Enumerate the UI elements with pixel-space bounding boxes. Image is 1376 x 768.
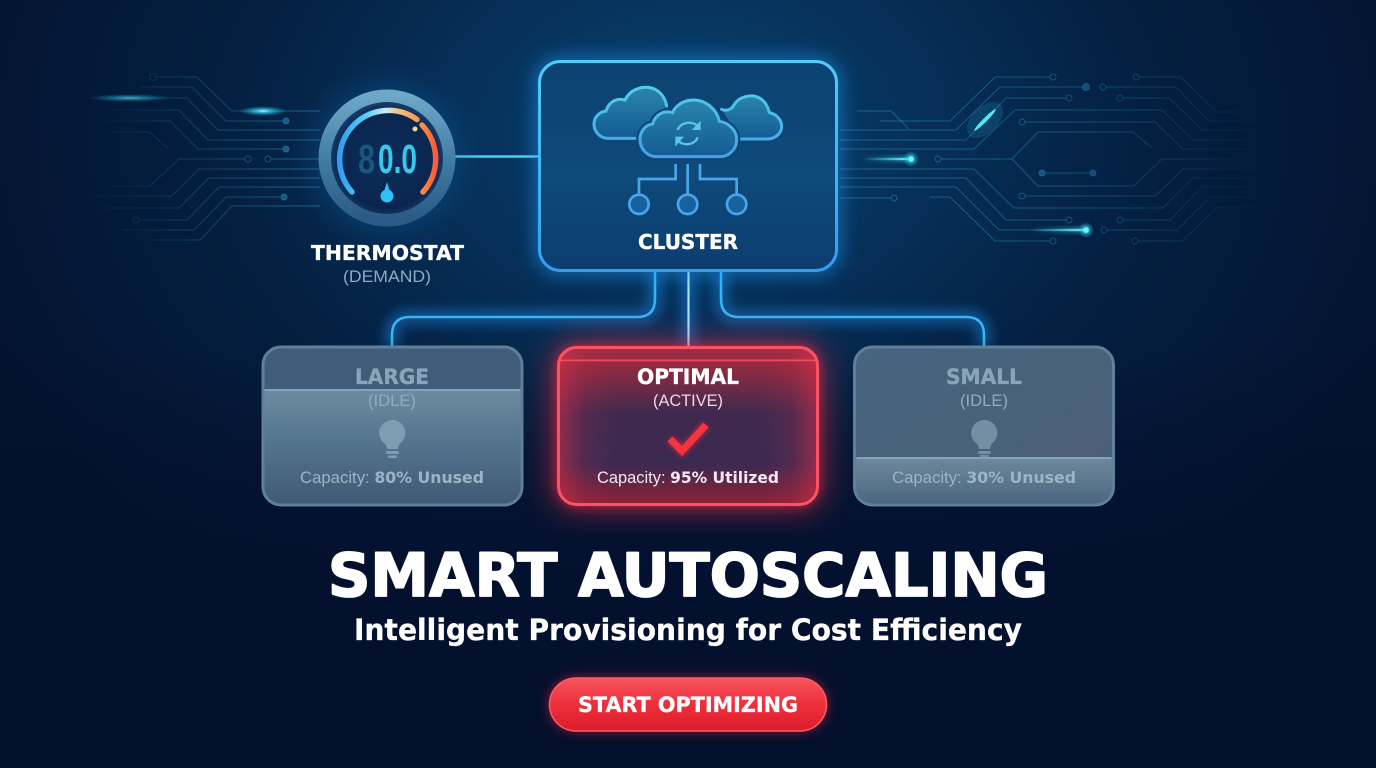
gauge dial bbox=[331, 102, 443, 214]
thermostat label bbox=[311, 241, 464, 286]
icon: red check mark bbox=[670, 425, 706, 451]
panel: large idle bbox=[263, 347, 522, 505]
connector: thermostat to cluster bbox=[454, 153, 540, 160]
large capacity: Capacity: 80% Unused bbox=[300, 468, 484, 487]
subtitle: Intelligent Provisioning for Cost Efficiency bbox=[354, 613, 1022, 647]
digital temperature readout active digits: 0.0 bbox=[378, 136, 417, 182]
icon: clouds with sync bbox=[594, 87, 782, 214]
large title: LARGE bbox=[355, 365, 429, 389]
thermostat label: THERMOSTAT bbox=[311, 241, 464, 265]
icon: dim light bulb bbox=[971, 420, 997, 458]
small capacity: Capacity: 30% Unused bbox=[892, 468, 1076, 487]
cluster label: CLUSTER bbox=[638, 230, 738, 254]
large status: (IDLE) bbox=[368, 391, 416, 410]
panel: cluster bbox=[536, 58, 840, 274]
glowing signal sparks bbox=[88, 94, 1094, 238]
thermostat gauge bbox=[289, 60, 485, 256]
optimal title: OPTIMAL bbox=[637, 365, 739, 389]
gauge needle bbox=[380, 182, 394, 203]
left circuit traces bbox=[90, 74, 320, 240]
gauge marker bbox=[412, 126, 418, 132]
gauge arc bbox=[340, 110, 436, 192]
right circuit traces bbox=[840, 74, 1270, 244]
gauge bezel bbox=[325, 96, 449, 220]
thermostat label: (DEMAND) bbox=[343, 267, 431, 286]
icon: dim light bulb bbox=[379, 420, 405, 458]
small title: SMALL bbox=[946, 365, 1022, 389]
optimal capacity: Capacity: 95% Utilized bbox=[597, 468, 779, 487]
small status: (IDLE) bbox=[960, 391, 1008, 410]
panel: small idle bbox=[854, 347, 1114, 505]
button: start optimizing: START OPTIMIZING bbox=[578, 693, 798, 717]
button: start optimizing bbox=[549, 678, 827, 731]
optimal status: (ACTIVE) bbox=[653, 391, 723, 410]
panel: optimal active bbox=[552, 341, 824, 511]
connectors: cluster to size options bbox=[392, 271, 984, 347]
title: SMART AUTOSCALING bbox=[328, 541, 1048, 611]
digital temperature readout: 8 bbox=[358, 136, 375, 182]
